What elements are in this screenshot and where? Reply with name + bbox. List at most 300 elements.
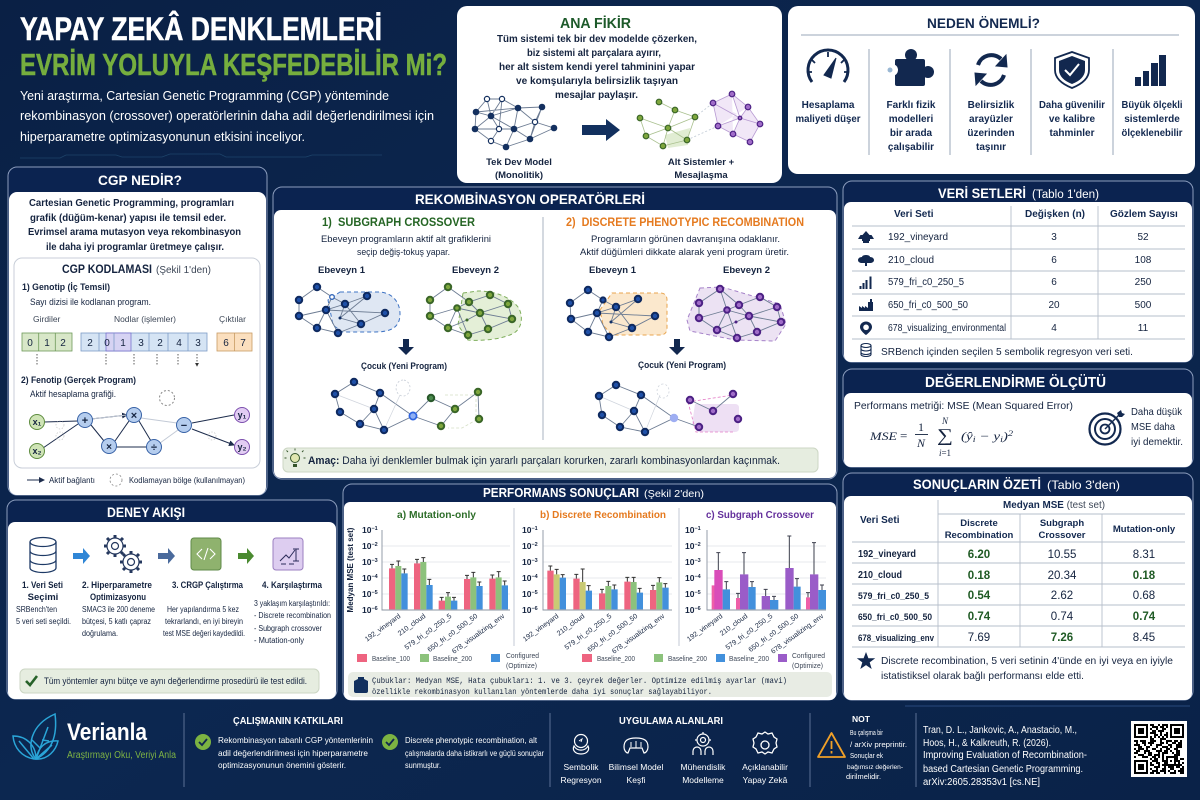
icon: symbolic regression: [573, 734, 589, 754]
formula: mse: − y: [976, 429, 1001, 443]
step descriptions: 5 veri seti seçildi.: [16, 617, 71, 626]
citation: based Cartesian Genetic Programming.: [923, 764, 1083, 775]
formula: mse: N: [941, 416, 949, 426]
table: datasets: 20: [1048, 300, 1060, 311]
child graph: [332, 379, 482, 433]
brand: [67, 719, 176, 761]
chart: mutation-only: 10: [362, 573, 371, 583]
note: Sonuçlar ek: [850, 753, 883, 760]
heading: performans: (Şekil 2'den): [644, 489, 704, 500]
table: datasets: Gözlem Sayısı: [1110, 209, 1178, 220]
step descriptions: SMAC3 ile 200 deneme: [82, 605, 155, 614]
dataset icons: [858, 231, 874, 335]
heading: veri setleri: [938, 185, 1099, 201]
phenotype graph: x₂: [32, 446, 42, 456]
benefit labels: sistemlerde: [1124, 114, 1180, 125]
chart: mutation-only: −5: [371, 590, 378, 596]
chart note: özellikle rekombinasyon kullanılan yöntemlerde daha iyi sonuçlar sağlayabiliyor.: [372, 688, 712, 697]
table: datasets: 210_cloud: [888, 255, 934, 266]
panel: rekombinasyon operatörleri: [273, 187, 837, 479]
step descriptions: - Mutation-only: [254, 636, 304, 645]
formula: mse: ): [1002, 429, 1008, 443]
table: results: 7.26: [1051, 632, 1073, 644]
table: datasets: 108: [1135, 255, 1152, 266]
panel: performans sonuçları: [343, 484, 837, 700]
column: subgraph crossover: [296, 215, 521, 433]
chart legends: (Optimize): [792, 661, 823, 670]
table: datasets: 3: [1051, 232, 1057, 243]
table: results: 0.74: [1051, 611, 1074, 623]
title: [20, 11, 447, 82]
monolithic model graph: [472, 96, 557, 150]
parent 2 graph: [687, 286, 786, 341]
panel: neden önemli: [788, 6, 1195, 174]
chart: mutation-only: 650_fri_c0_500_50: [427, 613, 479, 654]
formula: mse: [869, 416, 1013, 458]
contributions: [195, 716, 544, 770]
legend: Aktif bağlantı: [49, 475, 95, 485]
table: datasets: [888, 209, 1178, 334]
icon: explainable ai gear: [753, 732, 777, 754]
genotype labels: 1) Genotip (İç Temsil): [22, 282, 110, 293]
parent labels: [589, 265, 770, 276]
parent labels: Ebeveyn 2: [452, 265, 499, 276]
panel: veri setleri: [843, 181, 1193, 362]
application areas: Açıklanabilir: [742, 762, 788, 772]
chart legends: Configured: [792, 651, 825, 660]
callout: amaç: Amaç: Daha iyi denklemler bulmak için yararlı parçaları korurken, zararlı kombinasyonlardan kaçınmak.: [308, 455, 780, 467]
chart: discrete recombination: −2: [531, 542, 538, 548]
note: Bu çalışma bir: [850, 730, 883, 737]
genotype number array: 1: [44, 338, 50, 349]
phenotype labels: 2) Fenotip (Gerçek Program): [21, 375, 136, 386]
chart legends: [357, 651, 825, 670]
citation: Improving Evaluation of Recombination-: [923, 750, 1087, 761]
step descriptions: SRBench'ten: [16, 605, 57, 614]
genotype labels: Girdiler: [33, 314, 61, 324]
parent labels: Ebeveyn 1: [318, 265, 366, 276]
chart: discrete recombination: −5: [531, 590, 538, 596]
heading: rekombinasyon: REKOMBİNASYON OPERATÖRLERİ: [415, 191, 645, 207]
chart legends: Baseline_200: [668, 654, 707, 663]
icon: database: [30, 538, 56, 572]
application areas: Sembolik: [564, 762, 599, 772]
subgraph description: Ebeveyn programların aktif alt grafiklerini: [321, 234, 491, 245]
step descriptions: bütçesi, 5 katlı çapraz: [82, 617, 151, 626]
subgraph heading: 1) SUBGRAPH CROSSOVER: [322, 215, 475, 229]
cgp intro text: [28, 198, 241, 253]
subsystems graph: [637, 91, 763, 149]
child label: Çocuk (Yeni Program): [638, 360, 726, 371]
application areas: Regresyon: [560, 775, 602, 785]
icon: code block: [191, 538, 221, 570]
genotype number array: 2: [60, 338, 66, 349]
cgp intro text: Evrimsel arama mutasyon veya rekombinasyon: [28, 227, 241, 238]
main idea text: biz sistemi alt parçalara ayırır,: [527, 48, 661, 59]
icon: scale bars: [1135, 55, 1166, 86]
genotype labels: Sayı dizisi ile kodlanan program.: [30, 297, 151, 307]
chart: discrete recombination: 10: [522, 525, 531, 535]
heading: veri setleri: VERİ SETLERİ: [938, 185, 1026, 201]
formula: mse: i: [973, 435, 976, 444]
cgp intro text: grafik (düğüm-kenar) yapısı ile temsil eder.: [30, 213, 226, 224]
chart legends: Baseline_200: [597, 654, 635, 663]
chart titles: c) Subgraph Crossover: [706, 509, 814, 521]
contributions: optimizasyonunun önemini gösterir.: [218, 760, 346, 770]
citation: arXiv:2605.28353v1 [cs.NE]: [923, 777, 1040, 788]
chart: subgraph crossover: 10: [685, 605, 694, 615]
table: results: Veri Seti: [860, 515, 900, 526]
table: results: 0.54: [968, 590, 991, 602]
brand: Verianla: [67, 719, 148, 746]
legend: Kodlamayan bölge (kullanılmayan): [129, 475, 245, 485]
panel: sonuçların özeti: [843, 473, 1193, 700]
chart: subgraph crossover: −3: [694, 558, 701, 564]
summary note: Discrete recombination, 5 veri setinin 4'ünde en iyi veya en iyiyle: [881, 655, 1173, 667]
formula: mse: MSE: [869, 429, 898, 443]
formula: mse: 1: [918, 420, 924, 434]
step descriptions: tekrarlandı, en iyi bireyin: [165, 617, 243, 626]
chart: subgraph crossover: [685, 525, 826, 656]
summary note: istatistiksel olarak bağlı performansı elde etti.: [881, 670, 1084, 682]
parent 1 graph: [567, 287, 667, 340]
panel: cgp nedir: [8, 167, 267, 495]
chart legends: (Optimize): [506, 661, 537, 670]
chart: subgraph crossover: −1: [694, 526, 701, 532]
genotype labels: [22, 282, 246, 324]
step descriptions: - Subgraph crossover: [254, 624, 322, 633]
table: results: Subgraph: [1040, 518, 1084, 529]
citation: Tran, D. L., Jankovic, A., Anastacio, M.,: [923, 725, 1077, 736]
benefit labels: ve kalibre: [1049, 114, 1096, 125]
note: [846, 714, 907, 781]
heading: değerlendirme: DEĞERLENDİRME ÖLÇÜTÜ: [925, 373, 1106, 391]
chart: mutation-only: −1: [371, 526, 378, 532]
chart: discrete recombination: 678_visualizing_env: [611, 613, 667, 656]
step descriptions: [16, 599, 331, 645]
chart note: Çubuklar: Medyan MSE, Hata çubukları: 1. ve 3. çeyrek değerler. Optimize edilmiş ayarlar (mavi): [372, 677, 787, 686]
table: results: 0.74: [1133, 611, 1156, 623]
step descriptions: - Discrete recombination: [254, 611, 331, 620]
summary note: [881, 655, 1173, 682]
icon: comparison chart: [273, 538, 303, 570]
subtitle: Yeni araştırma, Cartesian Genetic Programming (CGP) yönteminde: [20, 88, 389, 103]
step titles: Seçimi: [28, 592, 58, 603]
benefit labels: Hesaplama: [802, 100, 855, 111]
table: datasets: Değişken (n): [1025, 209, 1085, 220]
contributions: Discrete phenotypic recombination, alt: [405, 735, 538, 745]
chart: discrete recombination: 10: [522, 589, 531, 599]
heading: deney akışı: DENEY AKIŞI: [107, 505, 185, 520]
title: YAPAY ZEKÂ DENKLEMLERİ: [20, 11, 382, 47]
cgp kodlaması heading: CGP KODLAMASI: [62, 264, 152, 276]
chart: mutation-only: 192_vineyard: [364, 613, 402, 643]
parent labels: [318, 265, 499, 276]
benefit labels: çalışabilir: [888, 142, 934, 153]
cgp intro text: Cartesian Genetic Programming, programları: [29, 198, 234, 209]
table: results: 210_cloud: [858, 570, 902, 581]
chart titles: [397, 509, 814, 521]
citation: Hoos, H., & Kalkreuth, R. (2026).: [923, 738, 1051, 749]
column: discrete phenotypic recombination: [566, 215, 804, 435]
discrete description: [580, 234, 789, 258]
benefit labels: taşınır: [976, 142, 1006, 153]
chart: discrete recombination: 10: [522, 541, 531, 551]
chart: mutation-only: −2: [371, 542, 378, 548]
chart: subgraph crossover: 10: [685, 525, 694, 535]
chart: subgraph crossover: −2: [694, 542, 701, 548]
table: datasets: 6: [1051, 277, 1057, 288]
cgp intro text: ile daha iyi programlar üretmeye çalışır.: [46, 242, 224, 253]
contributions: ÇALIŞMANIN KATKILARI: [233, 716, 343, 727]
note: bağımsız değerlen-: [847, 764, 903, 771]
arrow: [238, 548, 254, 564]
formula: mse: 2: [1008, 429, 1013, 438]
chart: discrete recombination: −1: [531, 526, 538, 532]
application areas: Modelleme: [682, 775, 724, 785]
heading: cgp nedir: CGP NEDİR?: [98, 172, 182, 188]
phenotype graph: −: [181, 420, 187, 432]
table: datasets: 650_fri_c0_500_50: [888, 300, 968, 311]
chart: mutation-only: [362, 525, 510, 656]
table: datasets: 4: [1051, 323, 1057, 334]
chart: discrete recombination: 10: [522, 573, 531, 583]
legend: [27, 474, 245, 486]
chart: mutation-only: 10: [362, 525, 371, 535]
table: results: Recombination: [945, 530, 1013, 541]
chart: subgraph crossover: 10: [685, 541, 694, 551]
chart: discrete recombination: 210_cloud: [556, 613, 586, 638]
main idea text: ve komşularıyla belirsizlik taşıyan: [516, 76, 678, 87]
genotype labels: Çıktılar: [219, 314, 246, 324]
chart: mutation-only: 579_fri_c0_250_5: [404, 613, 453, 652]
benefit labels: bir arada: [890, 128, 933, 139]
table: results: 678_visualizing_env: [858, 633, 935, 644]
down arrow: [398, 339, 414, 355]
icon: star: [857, 652, 875, 669]
chart: subgraph crossover: 10: [685, 573, 694, 583]
step descriptions: 3 yaklaşım karşılaştırıldı:: [254, 599, 330, 608]
table: datasets: 678_visualizing_environmental: [888, 323, 1006, 334]
icon: flask: [354, 677, 368, 693]
takeaway text: [1131, 406, 1183, 448]
contributions: çalışmalarda daha istikrarlı ve güçlü sonuçlar: [405, 748, 544, 758]
cgp kodlaması heading: [62, 264, 211, 276]
chart titles: b) Discrete Recombination: [540, 509, 666, 521]
graph labels: [486, 157, 735, 181]
chart: mutation-only: −4: [371, 574, 379, 580]
application areas: Yapay Zekâ: [743, 775, 788, 785]
chart: discrete recombination: −3: [531, 558, 538, 564]
title: EVRİM YOLUYLA KEŞFEDEBİLİR Mi?: [20, 47, 447, 82]
subtitle: [20, 88, 434, 144]
chart: discrete recombination: [522, 525, 672, 656]
panel: ana fikir: [457, 6, 782, 183]
table: results: 192_vineyard: [858, 549, 916, 560]
takeaway text: MSE daha: [1131, 421, 1175, 433]
table: results: 8.31: [1133, 549, 1155, 561]
benefit labels: Daha güvenilir: [1039, 100, 1105, 111]
benefit labels: maliyeti düşer: [796, 114, 861, 125]
genotype labels: Nodlar (işlemler): [114, 314, 176, 324]
cgp kodlaması heading: (Şekil 1'den): [156, 265, 211, 276]
chart: subgraph crossover: 10: [685, 557, 694, 567]
icon: shield: [1055, 52, 1089, 88]
genotype number array: [22, 333, 252, 351]
table: results: 20.34: [1048, 570, 1077, 582]
phenotype graph: [30, 390, 250, 458]
chart: subgraph crossover: 579_fri_c0_250_5: [725, 613, 774, 652]
benefit labels: üzerinden: [967, 128, 1015, 139]
chart titles: a) Mutation-only: [397, 509, 476, 521]
icon: check: [382, 734, 398, 750]
table: datasets: Veri Seti: [894, 209, 934, 220]
callout: same budget: [20, 669, 319, 693]
chart: mutation-only: 10: [362, 541, 371, 551]
chart legends: Baseline_200: [433, 654, 472, 663]
chart: mutation-only: 10: [362, 557, 371, 567]
chart: mutation-only: 10: [362, 605, 371, 615]
graph labels: Mesajlaşma: [674, 170, 728, 181]
contributions: Rekombinasyon tabanlı CGP yöntemlerinin: [218, 735, 373, 745]
chart: subgraph crossover: 10: [685, 589, 694, 599]
table: datasets: 192_vineyard: [888, 232, 948, 243]
phenotype graph: y₂: [237, 442, 247, 452]
chart: mutation-only: −3: [371, 558, 378, 564]
contributions: sunmuştur.: [405, 760, 441, 770]
chart: mutation-only: −6: [371, 606, 378, 612]
discrete heading: 2) DISCRETE PHENOTYPIC RECOMBINATION: [566, 215, 804, 229]
sub-panel: cgp kodlaması: [14, 258, 260, 468]
formula: mse: N: [916, 436, 926, 450]
table: results: 10.55: [1048, 549, 1076, 561]
heading: veri setleri: (Tablo 1'den): [1032, 189, 1099, 201]
benefit labels: Büyük ölçekli: [1122, 100, 1183, 111]
benefit labels: tahminler: [1049, 128, 1095, 139]
child graph: [596, 382, 741, 435]
phenotype graph: y₁: [238, 410, 247, 420]
phenotype graph: ÷: [151, 442, 157, 454]
arrow: [73, 548, 90, 564]
step titles: [22, 580, 323, 603]
step descriptions: test MSE değeri kaydedildi.: [163, 629, 245, 638]
child label: Çocuk (Yeni Program): [361, 361, 447, 372]
table: results: 579_fri_c0_250_5: [858, 591, 930, 602]
icon: puzzle: [886, 49, 934, 86]
chart: subgraph crossover: 678_visualizing_env: [770, 613, 826, 656]
takeaway text: Daha düşük: [1131, 406, 1183, 418]
chart: mutation-only: 10: [362, 589, 371, 599]
table: results: 650_fri_c0_500_50: [858, 612, 932, 623]
chart: subgraph crossover: 210_cloud: [719, 613, 749, 638]
subgraph description: [321, 234, 491, 258]
qr code: [1131, 721, 1187, 777]
table: datasets: 11: [1138, 323, 1149, 334]
table: datasets: 250: [1135, 277, 1152, 288]
chart: subgraph crossover: −4: [694, 574, 702, 580]
parent 2 graph: [427, 284, 521, 340]
genotype number array: 3: [195, 338, 201, 349]
chart: subgraph crossover: −6: [694, 606, 701, 612]
main idea text: [497, 34, 697, 101]
chart: subgraph crossover: 650_fri_c0_500_50: [748, 613, 800, 654]
genotype number array: 0: [104, 338, 110, 349]
heading: sonuçlar: [913, 476, 1120, 492]
step titles: Optimizasyonu: [90, 592, 146, 603]
table: results: 2.62: [1051, 590, 1073, 602]
heading: performans: PERFORMANS SONUÇLARI: [483, 486, 639, 500]
arrow: [582, 119, 620, 141]
table: results: Discrete: [960, 518, 998, 529]
table: results: 6.20: [968, 549, 990, 561]
table: results: 0.18: [1133, 570, 1156, 582]
chart: discrete recombination: −6: [531, 606, 538, 612]
contributions: adil değerlendirilmesi için hiperparametre: [218, 748, 368, 758]
callout: amaç: [283, 448, 818, 472]
genotype number array: 2: [87, 338, 93, 349]
brand: Araştırmayı Oku, Veriyi Anla: [67, 750, 176, 761]
table: datasets: 500: [1135, 300, 1152, 311]
table: datasets: 52: [1137, 232, 1149, 243]
benefit labels: ölçeklenebilir: [1122, 128, 1183, 139]
benefit labels: [796, 100, 1183, 153]
chart legends: Configured: [506, 651, 539, 660]
formula: mse: =: [900, 428, 907, 443]
srbench note: SRBench içinden seçilen 5 sembolik regresyon veri seti.: [881, 346, 1133, 358]
metric text: Performans metriği: MSE (Mean Squared Error): [854, 400, 1073, 412]
icon: gears: [104, 535, 142, 573]
note: dirilmelidir.: [846, 774, 881, 781]
icon: refresh: [975, 55, 1007, 85]
chart: mutation-only: 210_cloud: [397, 613, 427, 638]
formula: mse: (ŷ: [961, 429, 970, 443]
benefit labels: arayüzler: [969, 114, 1013, 125]
genotype number array: 1: [120, 338, 126, 349]
heading: sonuçlar: (Tablo 3'den): [1047, 478, 1120, 492]
benefit labels: Farklı fizik: [887, 100, 936, 111]
table: results: 7.69: [968, 632, 990, 644]
main idea text: Tüm sistemi tek bir dev modelde çözerken,: [497, 34, 697, 45]
table: results: 0.68: [1133, 590, 1155, 602]
chart: discrete recombination: 579_fri_c0_250_5: [564, 613, 613, 652]
genotype number array: 7: [240, 338, 246, 349]
table: results: [858, 500, 1176, 644]
table: results: Medyan MSE (test set): [1003, 500, 1105, 511]
application areas: [560, 716, 788, 785]
icon: bulb: [284, 448, 306, 467]
note: NOT: [852, 714, 871, 724]
chart: mutation-only: 678_visualizing_env: [451, 613, 507, 656]
step descriptions: doğrulama.: [82, 629, 118, 638]
table: results: 0.74: [968, 611, 991, 623]
phenotype graph: x₁: [33, 417, 42, 427]
genotype number array: 0: [27, 338, 33, 349]
parent 1 graph: [296, 284, 400, 336]
icon: target: [1090, 410, 1125, 444]
phenotype graph: +: [82, 415, 88, 427]
phenotype labels: Aktif hesaplama grafiği.: [30, 389, 116, 399]
table: results: 0.18: [968, 570, 991, 582]
discrete description: Aktif düğümleri dikkate alarak yeni program üretir.: [580, 247, 789, 258]
phenotype labels: [21, 375, 136, 399]
application areas: Mühendislik: [681, 762, 726, 772]
genotype number array: 4: [176, 338, 182, 349]
icon: gauge: [808, 50, 848, 82]
genotype number array: 6: [223, 338, 229, 349]
graph labels: Alt Sistemler +: [668, 157, 735, 168]
footer: [13, 713, 1187, 788]
chart: discrete recombination: 650_fri_c0_500_50: [587, 613, 639, 654]
